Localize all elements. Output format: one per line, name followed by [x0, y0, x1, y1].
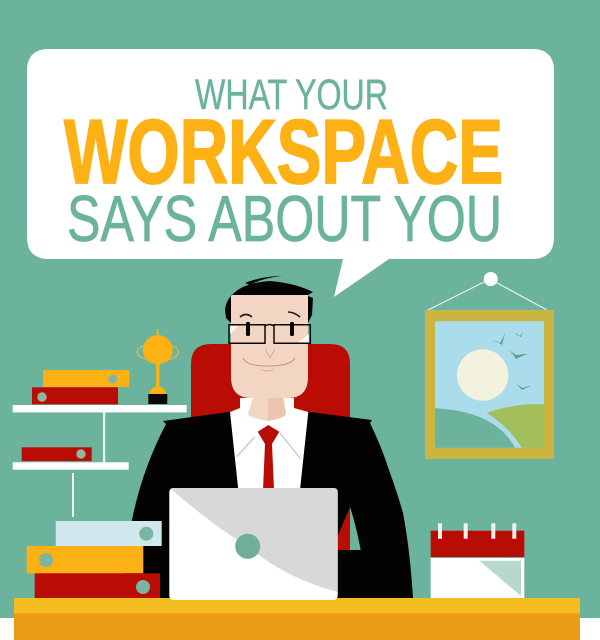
office chair: [191, 344, 350, 417]
trophy detail: [150, 329, 166, 394]
sky: [435, 321, 544, 448]
nail: [484, 272, 498, 286]
speech bubble shape: [27, 49, 554, 297]
right eye: [290, 322, 294, 336]
framed picture: [425, 272, 554, 459]
trouser and arm gap: [336, 507, 350, 550]
left eye: [246, 322, 250, 336]
page fold: [479, 561, 521, 596]
face: [231, 295, 308, 398]
trophy: [137, 329, 178, 404]
hair wisp: [245, 276, 282, 285]
laptop logo: [235, 534, 260, 559]
calendar page: [431, 558, 524, 599]
shelf stems: [103, 412, 105, 463]
small red binder label: [76, 449, 86, 459]
hanging strings: [428, 279, 547, 310]
frame: [425, 310, 554, 459]
desk front: [14, 614, 580, 640]
collar lines: [237, 433, 301, 459]
title line: what your: WHAT YOUR: [195, 71, 388, 119]
left eyebrow: [240, 314, 252, 317]
lens glare: [230, 326, 309, 342]
shirt: [230, 398, 308, 490]
arm gap background: [350, 507, 361, 550]
small red binder: [22, 447, 92, 461]
light blue binder label: [139, 527, 153, 541]
red binder label: [136, 580, 150, 594]
teal hill: [435, 408, 515, 448]
lid shade: [172, 488, 338, 592]
calendar header: [431, 531, 524, 557]
yellow binder: [43, 370, 129, 387]
desk top: [14, 598, 580, 614]
chin line: [261, 369, 274, 371]
glasses frame: [229, 324, 310, 343]
yellow binder label: [108, 374, 117, 384]
neck shadow: [268, 395, 286, 421]
calendar rings: [440, 523, 514, 539]
laptop: [169, 488, 338, 600]
right eyebrow: [288, 312, 300, 317]
man at desk: [124, 276, 413, 598]
red binder label: [37, 392, 47, 402]
green hill: [487, 404, 544, 448]
neck: [248, 395, 268, 421]
light blue binder: [56, 521, 162, 546]
lower stem: [72, 473, 74, 517]
shelves with binders and trophy: [13, 329, 187, 517]
nose: [265, 349, 275, 358]
red binder: [35, 573, 160, 598]
jacket: [124, 412, 413, 598]
birds: [490, 331, 531, 390]
calendar: [431, 523, 524, 599]
speech bubble with title: [27, 49, 554, 297]
top shelf: [13, 405, 187, 412]
sun: [457, 349, 508, 401]
yellow binder label: [39, 553, 53, 567]
stacked binders on desk: [27, 521, 162, 598]
tie: [258, 425, 279, 490]
desk: [14, 598, 580, 640]
smile: [243, 358, 295, 366]
glasses: [229, 324, 310, 343]
trophy base: [148, 394, 167, 404]
red binder: [32, 387, 118, 404]
lower shelf: [13, 462, 129, 470]
hair: [225, 281, 313, 323]
trophy handles: [137, 343, 178, 361]
trophy cup: [143, 335, 173, 364]
laptop lid: [169, 488, 338, 600]
yellow binder: [27, 546, 143, 573]
